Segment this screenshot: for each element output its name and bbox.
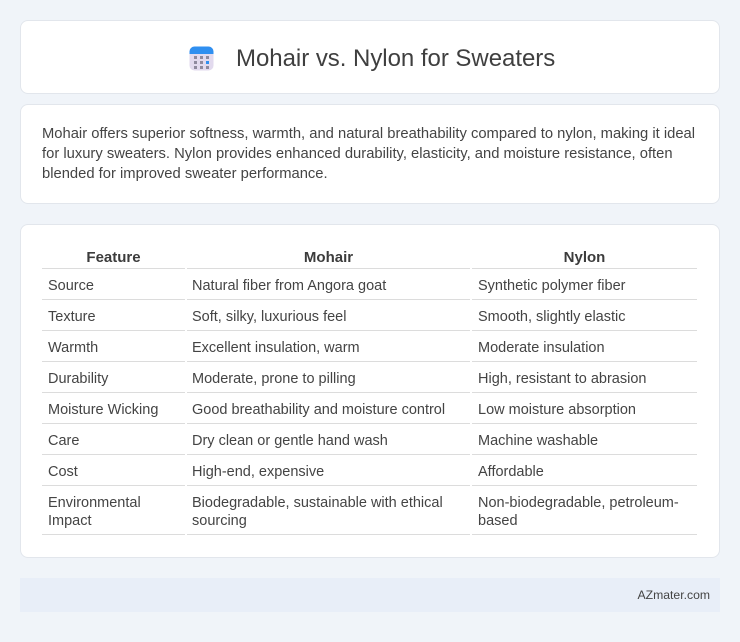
panel: comparison table [20,224,720,558]
row: cost [48,464,544,480]
row: cost: Affordable [478,464,544,480]
row: environmental impact: Environmental [48,495,141,511]
intro panel [20,104,720,204]
row: texture [48,309,626,325]
row: durability: Durability [48,371,108,387]
table header: Feature [86,249,141,266]
footer bar [20,578,720,612]
table header [86,249,605,266]
row: source: Natural fiber from Angora goat [192,278,386,294]
row: warmth: Moderate insulation [478,340,605,356]
row: environmental impact [48,495,679,529]
row: durability [48,371,646,387]
table header: Nylon [564,249,605,266]
title: Mohair vs. Nylon for Sweaters [236,45,555,72]
title panel [20,20,720,94]
row: texture: Smooth, slightly elastic [478,309,625,325]
row: moisture wicking: Good breathability and moisture control [192,402,445,418]
row: source: Synthetic polymer fiber [478,278,625,294]
row: source [48,278,626,294]
table header: Mohair [304,249,353,266]
row: durability: High, resistant to abrasion [478,371,646,387]
intro text: blended for improved sweater performance. [42,166,328,182]
row: moisture wicking: Low moisture absorption [478,402,636,418]
row: environmental impact: based [478,513,518,529]
icon: calendar [190,46,214,70]
row: environmental impact: sourcing [192,513,247,529]
row: texture: Texture [48,309,96,325]
row: cost: High-end, expensive [192,464,324,480]
intro text: for luxury sweaters. Nylon provides enhanced durability, elasticity, and moisture resistance, often [42,146,673,162]
row: durability: Moderate, prone to pilling [192,371,356,387]
row: environmental impact: Non-biodegradable, petroleum- [478,495,679,511]
row: care: Dry clean or gentle hand wash [192,433,388,449]
row: moisture wicking: Moisture Wicking [48,402,158,418]
intro text [42,126,695,182]
row: warmth: Warmth [48,340,98,356]
intro text: Mohair offers superior softness, warmth, and natural breathability compared to nylon, making it ideal [42,126,695,142]
row: care: Care [48,433,79,449]
row: warmth: Excellent insulation, warm [192,340,360,356]
row: moisture wicking [48,402,636,418]
footer credit: AZmater.com [638,588,710,602]
row: source: Source [48,278,94,294]
row: cost: Cost [48,464,78,480]
row: environmental impact: Biodegradable, sustainable with ethical [192,495,443,511]
row: care: Machine washable [478,433,598,449]
row: texture: Soft, silky, luxurious feel [192,309,346,325]
row: warmth [48,340,605,356]
row: care [48,433,598,449]
row: environmental impact: Impact [48,513,92,529]
